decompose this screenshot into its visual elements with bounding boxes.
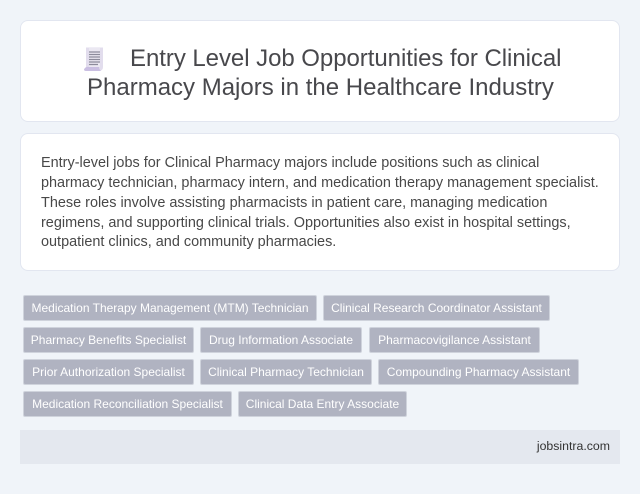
title: Entry Level Job Opportunities for Clinical bbox=[130, 45, 561, 72]
panel: description bbox=[20, 133, 620, 271]
tag: Medication Therapy Management (MTM) Technician bbox=[31, 301, 308, 315]
tag bbox=[23, 391, 232, 417]
description text: Entry-level jobs for Clinical Pharmacy majors include positions such as clinical bbox=[41, 155, 539, 171]
tag: Pharmacovigilance Assistant bbox=[378, 333, 531, 347]
footer source: jobsintra.com bbox=[537, 439, 610, 453]
tag bbox=[23, 327, 194, 353]
title bbox=[87, 45, 561, 101]
tag: Pharmacy Benefits Specialist bbox=[31, 333, 186, 347]
tag bbox=[238, 391, 407, 417]
tag: Clinical Data Entry Associate bbox=[246, 397, 399, 411]
description text bbox=[41, 155, 599, 250]
title: Pharmacy Majors in the Healthcare Industry bbox=[87, 74, 554, 101]
tag: Medication Reconciliation Specialist bbox=[32, 397, 223, 411]
tag: Drug Information Associate bbox=[209, 333, 353, 347]
tag bbox=[200, 327, 362, 353]
description text: regimens, and supporting clinical trials. Opportunities also exist in hospital settings, bbox=[41, 215, 571, 231]
footer bar bbox=[20, 430, 620, 464]
description text: These roles involve assisting pharmacists in patient care, managing medication bbox=[41, 195, 547, 211]
tag bbox=[378, 359, 579, 385]
tag: Prior Authorization Specialist bbox=[32, 365, 185, 379]
tag bbox=[23, 295, 317, 321]
tag bbox=[23, 359, 194, 385]
tag: Clinical Pharmacy Technician bbox=[208, 365, 364, 379]
tag bbox=[369, 327, 540, 353]
description text: outpatient clinics, and community pharmacies. bbox=[41, 234, 336, 250]
panel: title card bbox=[20, 20, 620, 122]
tag bbox=[323, 295, 550, 321]
description text: pharmacy technician, pharmacy intern, and medication therapy management specialist. bbox=[41, 175, 599, 191]
tag: Clinical Research Coordinator Assistant bbox=[331, 301, 542, 315]
icon: prescription document bbox=[84, 48, 103, 71]
tag bbox=[200, 359, 372, 385]
tag: Compounding Pharmacy Assistant bbox=[387, 365, 570, 379]
tag list bbox=[23, 295, 579, 417]
